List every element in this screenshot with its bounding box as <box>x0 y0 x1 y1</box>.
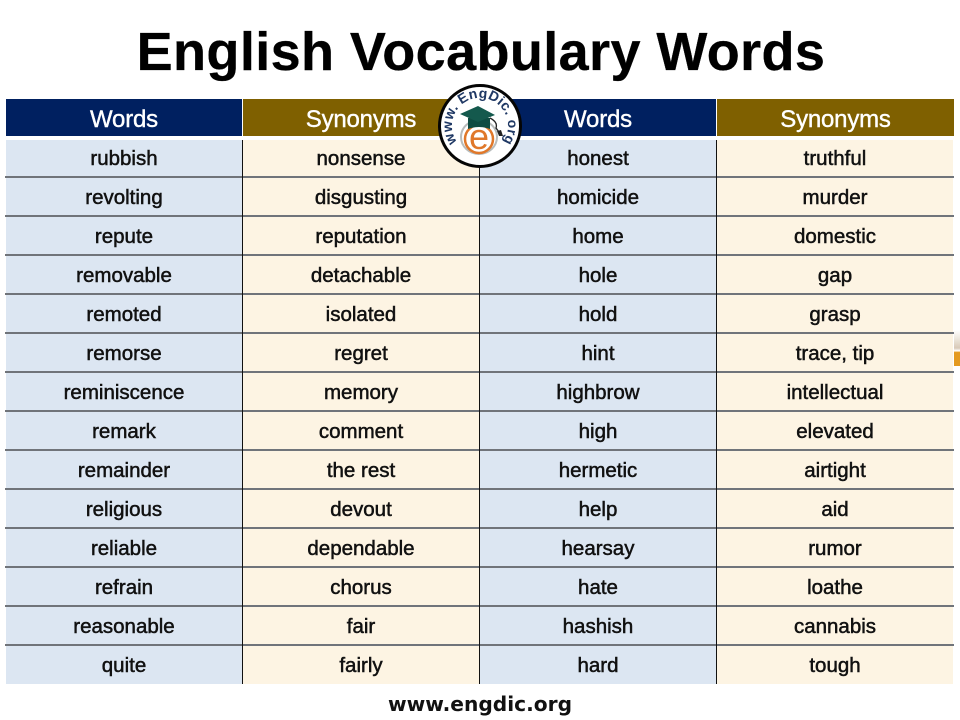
row: religious / help: aid <box>821 498 849 521</box>
row: remorse / hint: trace, tip <box>796 342 874 365</box>
row: remark / high: comment <box>319 420 403 443</box>
row: remorse / hint: remorse <box>86 342 162 365</box>
row: reasonable / hashish: fair <box>347 615 375 638</box>
row: revolting / homicide: disgusting <box>315 186 407 209</box>
row: religious / help: devout <box>330 498 392 521</box>
row: refrain / hate: chorus <box>330 576 392 599</box>
row: remorse / hint <box>5 335 954 374</box>
row: reliable / hearsay: reliable <box>91 537 157 560</box>
decorative clipped image at right edge <box>954 330 960 366</box>
row: rubbish / honest: truthful <box>804 147 866 170</box>
row: removable / hole: detachable <box>311 264 411 287</box>
row: reasonable / hashish: cannabis <box>794 615 876 638</box>
row: rubbish / honest: honest <box>567 147 629 170</box>
row: remoted / hold: remoted <box>86 303 162 326</box>
row: quite / hard: hard <box>577 654 619 677</box>
row: repute / home: home <box>572 225 624 248</box>
row: reminiscence / highbrow: highbrow <box>556 381 640 404</box>
row: revolting / homicide <box>5 179 954 218</box>
row: reliable / hearsay: dependable <box>307 537 415 560</box>
row: reminiscence / highbrow: reminiscence <box>64 381 184 404</box>
title: English Vocabulary Words <box>137 22 825 82</box>
row: refrain / hate: hate <box>578 576 618 599</box>
icon: EngDic logo badge: www. EngDic. org <box>444 90 516 146</box>
row: repute / home: repute <box>95 225 153 248</box>
row: remorse / hint: regret <box>334 342 388 365</box>
row: quite / hard <box>6 647 953 684</box>
icon: EngDic logo badge: e <box>469 116 489 157</box>
row: revolting / homicide: revolting <box>85 186 163 209</box>
row: reasonable / hashish: reasonable <box>73 615 175 638</box>
row: refrain / hate <box>5 569 954 608</box>
footer website url: www.engdic.org <box>388 692 572 716</box>
row: revolting / homicide: murder <box>803 186 867 209</box>
row: remorse / hint: hint <box>581 342 615 365</box>
row: removable / hole: hole <box>579 264 617 287</box>
row: remoted / hold: hold <box>579 303 617 326</box>
row: removable / hole: removable <box>76 264 172 287</box>
row: quite / hard: fairly <box>339 654 383 677</box>
row: repute / home: reputation <box>315 225 407 248</box>
row: reliable / hearsay: hearsay <box>562 537 634 560</box>
row: remark / high: elevated <box>796 420 874 443</box>
row: repute / home: domestic <box>794 225 876 248</box>
row: reminiscence / highbrow: intellectual <box>787 381 883 404</box>
table header row <box>6 99 954 136</box>
row: remainder / hermetic: hermetic <box>559 459 637 482</box>
row: remark / high: high <box>579 420 617 443</box>
row: quite / hard: quite <box>102 654 146 677</box>
row: religious / help <box>5 491 954 530</box>
row: refrain / hate: refrain <box>95 576 153 599</box>
row: revolting / homicide: homicide <box>557 186 639 209</box>
row: remoted / hold: grasp <box>809 303 861 326</box>
row: remoted / hold: isolated <box>326 303 396 326</box>
row: religious / help: help <box>579 498 617 521</box>
row: reasonable / hashish <box>5 608 954 647</box>
row: rubbish / honest <box>5 140 954 179</box>
row: removable / hole: gap <box>818 264 852 287</box>
row: remainder / hermetic <box>5 452 954 491</box>
row: quite / hard: tough <box>809 654 861 677</box>
row: remoted / hold <box>5 296 954 335</box>
row: reliable / hearsay: rumor <box>808 537 862 560</box>
row: remark / high: remark <box>92 420 156 443</box>
row: reminiscence / highbrow <box>5 374 954 413</box>
table header row: Synonyms <box>306 106 416 133</box>
table header row: Words <box>90 106 158 133</box>
table header row: Synonyms <box>780 106 891 133</box>
row: reasonable / hashish: hashish <box>563 615 633 638</box>
row: remainder / hermetic: remainder <box>78 459 170 482</box>
row: remainder / hermetic: the rest <box>327 459 395 482</box>
row: repute / home <box>5 218 954 257</box>
row: refrain / hate: loathe <box>807 576 863 599</box>
row: reminiscence / highbrow: memory <box>324 381 398 404</box>
row: remark / high <box>5 413 954 452</box>
row: remainder / hermetic: airtight <box>804 459 866 482</box>
row: rubbish / honest: nonsense <box>317 147 405 170</box>
row: rubbish / honest: rubbish <box>90 147 158 170</box>
row: removable / hole <box>5 257 954 296</box>
table header row: Words <box>564 106 632 133</box>
row: reliable / hearsay <box>5 530 954 569</box>
row: religious / help: religious <box>86 498 162 521</box>
